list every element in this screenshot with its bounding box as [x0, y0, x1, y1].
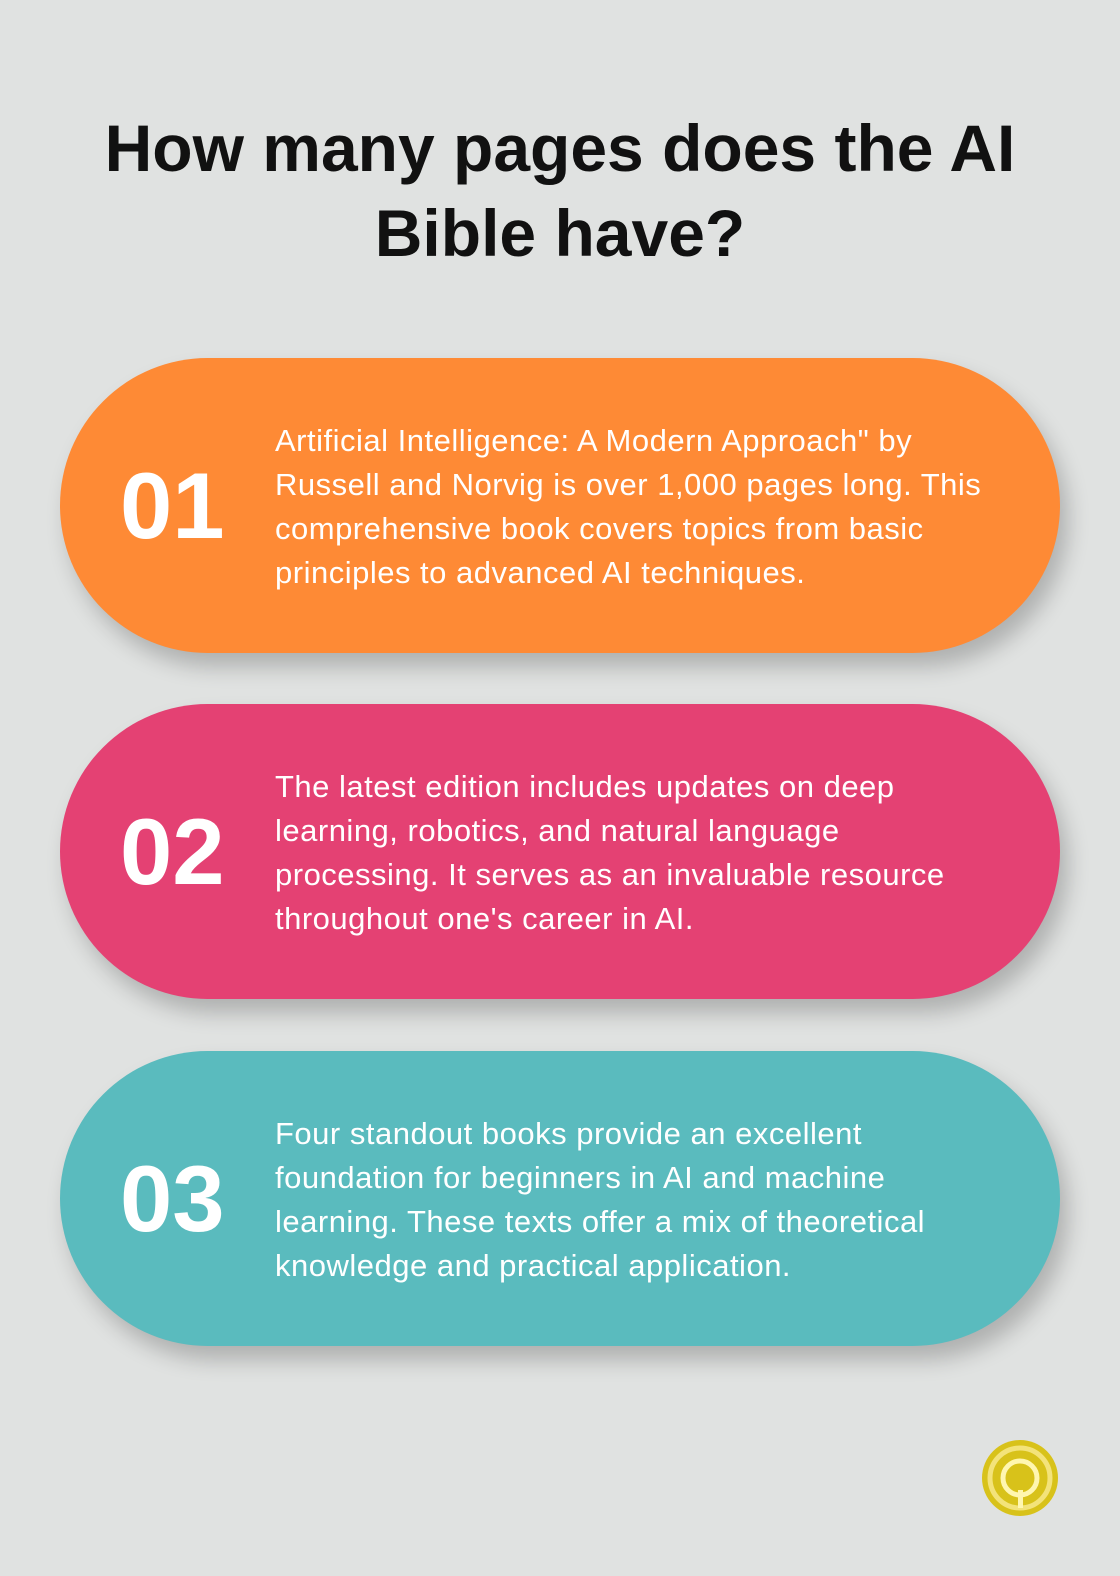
number 02: 02 — [120, 799, 225, 904]
text 03: learning. These texts offer a mix of theoretical — [275, 1204, 925, 1239]
text 03: knowledge and practical application. — [275, 1248, 791, 1283]
panel: 03 — [60, 1051, 1060, 1346]
title — [105, 111, 1015, 270]
text 02: throughout one's career in AI. — [275, 901, 694, 936]
text 03: foundation for beginners in AI and machine — [275, 1160, 885, 1195]
text 03: Four standout books provide an excellent — [275, 1116, 862, 1151]
text 01: Russell and Norvig is over 1,000 pages long. This — [275, 467, 981, 502]
text 02: The latest edition includes updates on deep — [275, 769, 895, 804]
text 01: comprehensive book covers topics from basic — [275, 511, 924, 546]
text 02 — [275, 769, 945, 936]
text 02: learning, robotics, and natural language — [275, 813, 840, 848]
number 03: 03 — [120, 1146, 225, 1251]
number 01: 01 — [120, 453, 225, 558]
title: Bible have? — [375, 196, 745, 270]
text 03 — [275, 1116, 925, 1283]
text 01 — [275, 423, 981, 590]
text 02: processing. It serves as an invaluable resource — [275, 857, 945, 892]
panel: 01 — [60, 358, 1060, 653]
text 01: Artificial Intelligence: A Modern Approach" by — [275, 423, 912, 458]
title: How many pages does the AI — [105, 111, 1015, 185]
text 01: principles to advanced AI techniques. — [275, 555, 805, 590]
icon: logo — [982, 1440, 1058, 1516]
panel: 02 — [60, 704, 1060, 999]
